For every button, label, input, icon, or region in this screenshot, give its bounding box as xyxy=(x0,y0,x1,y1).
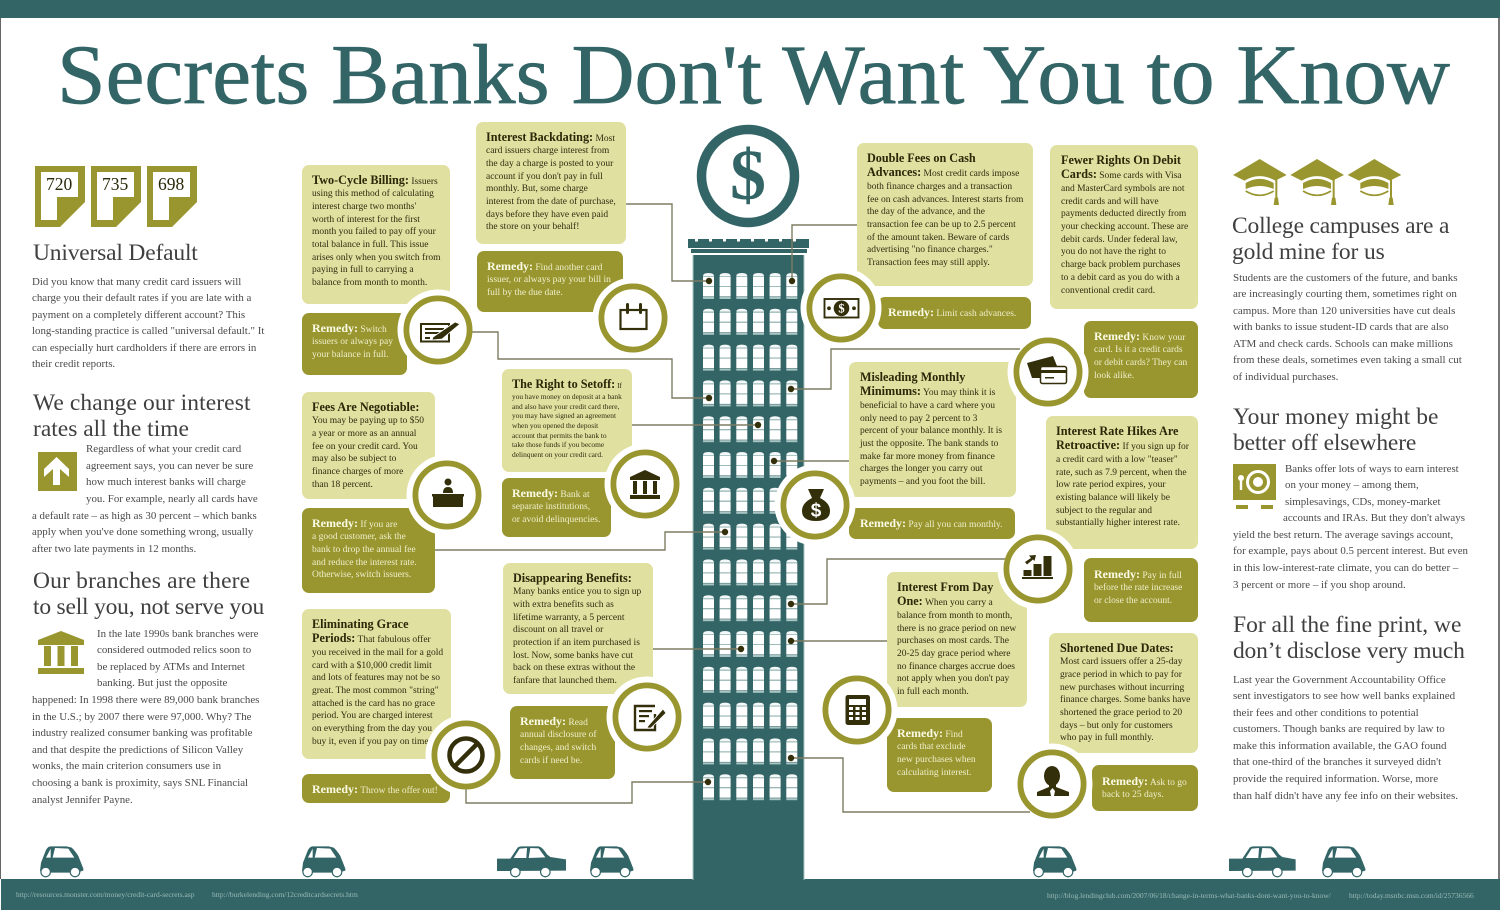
card: two-cycle billing: worth of interest for the first xyxy=(312,215,420,225)
card: the right to setoff: account that permits the bank to xyxy=(512,431,607,440)
text: interest rates lower xyxy=(32,510,257,555)
card: misleading monthly minimums: beneficial to have a card where you xyxy=(860,401,995,411)
card: eliminating grace periods: great. The most common "string" xyxy=(312,686,439,696)
top bar xyxy=(0,0,1500,18)
remedy: fees are negotiable xyxy=(302,508,435,593)
remedy: misleading minimums: Remedy: Pay all you can monthly. xyxy=(860,516,1002,530)
footer source link 3: http://blog.lendingclub.com/2007/06/18/change-in-terms-what-banks-dont-want-you-to-know/ xyxy=(1047,891,1331,900)
car 1 xyxy=(40,846,83,877)
card: interest from day one: 20-25 day grace period where xyxy=(897,649,1010,659)
card: shortened due dates: finance charges. Some banks have xyxy=(1060,695,1190,705)
card: fewer rights on debit cards: debit cards. Under federal law, xyxy=(1061,235,1178,245)
card: eliminating grace periods: and lots of features may not be so xyxy=(312,673,440,683)
card: two-cycle billing: interest charge two months' xyxy=(312,202,416,212)
car 5 xyxy=(1033,846,1076,877)
card: eliminating grace periods: period. You are charged interest xyxy=(312,711,433,721)
card: fees are negotiable: may also be subject to xyxy=(312,454,396,464)
remedy: eliminating grace periods xyxy=(302,774,450,803)
icon: bank building xyxy=(613,452,677,516)
remedy: misleading minimums xyxy=(849,508,1015,539)
card: two-cycle billing: month you failed to pay off your xyxy=(312,227,436,237)
icon: person xyxy=(1020,752,1084,816)
heading: our branches xyxy=(33,568,264,620)
right page edge xyxy=(1498,18,1500,879)
heading: our branches: Our branches are there xyxy=(33,568,250,594)
remedy: rate hikes: before the rate increase xyxy=(1094,583,1182,593)
text: your money wrapped xyxy=(1283,462,1465,524)
text: fine print: customers. Though banks are required by law to xyxy=(1233,723,1445,735)
card: interest backdating: account if you don't pay in full xyxy=(486,172,603,182)
card: shortened due dates: days – but only for customers xyxy=(1060,721,1173,731)
remedy: shortened due dates xyxy=(1092,765,1198,811)
heading: universal default: Universal Default xyxy=(33,240,198,266)
card: two-cycle billing: paying in full to carrying a xyxy=(312,265,414,275)
card: the right to setoff: delinquent on your credit card. xyxy=(512,450,603,459)
card: misleading monthly minimums: only need to pay 2 percent to 3 xyxy=(860,414,977,424)
heading: your money: Your money might be xyxy=(1233,404,1438,430)
heading: your money xyxy=(1233,404,1438,456)
car 6 sedan xyxy=(1229,846,1296,877)
card: double fees on cash advances: the day of the advance, and the xyxy=(867,207,985,217)
card: the right to setoff: take those funds if you become xyxy=(512,440,604,449)
card: fewer rights on debit cards: you do not have the right to xyxy=(1061,247,1166,257)
heading: your money: better off elsewhere xyxy=(1233,430,1416,456)
card: two-cycle billing: Two-Cycle Billing: Issuers xyxy=(312,172,438,186)
card: interest rate hikes are retroactive: low rate period expires, your xyxy=(1056,480,1165,490)
remedy: double fees xyxy=(878,297,1031,329)
panel: universal default icons xyxy=(35,166,197,227)
card: fewer rights on debit cards: credit cards and will have xyxy=(1061,197,1159,207)
card: disappearing benefits: with extra benefits such as xyxy=(513,600,614,610)
text: branches wrapped: be replaced by ATMs and Internet xyxy=(97,661,245,673)
footer source link 1: http://resources.monster.com/money/credit-card-secrets.asp xyxy=(16,890,194,899)
remedy: fees are negotiable: a good customer, ask the xyxy=(312,532,406,542)
building xyxy=(688,239,809,880)
heading: college campuses xyxy=(1232,213,1450,265)
card: shortened due dates: shortened the grace period to 20 xyxy=(1060,708,1182,718)
card: interest backdating: card issuers charge interest from xyxy=(486,146,609,156)
text: branches wrapped: banking. But just the opposite xyxy=(97,677,227,689)
card: interest rate hikes are retroactive: subject to the regular and xyxy=(1056,506,1152,516)
icon halos xyxy=(398,268,1092,824)
text: your money lower: yield the best return. The average savings account, xyxy=(1233,529,1453,541)
text: universal default: Did you know that many credit card issuers will xyxy=(32,276,241,288)
card: shortened due dates xyxy=(1049,633,1198,753)
remedy: fees are negotiable: and reduce the interest rate. xyxy=(312,558,417,568)
text: universal default: payment on a completely different account? This xyxy=(32,309,245,321)
card: interest from day one: not apply when you don't pay xyxy=(897,674,1009,684)
card: interest backdating: the day a charge is posted to your xyxy=(486,159,613,169)
text: fine print: Last year the Government Accountability Office xyxy=(1233,674,1446,686)
text: your money wrapped: simplesavings, CDs, money-market xyxy=(1285,496,1440,508)
text: interest rates wrapped: how much interest banks will charge xyxy=(86,476,246,488)
text: universal default: charge you their default rates if you are late with a xyxy=(32,292,251,304)
heading: we change our interest rates: rates all the time xyxy=(33,416,189,442)
card: eliminating grace periods: buy it, even if you pay on time. xyxy=(312,737,431,747)
card: the right to setoff: The Right to Setoff: If xyxy=(512,376,622,390)
card: the right to setoff: and also have your credit card there, xyxy=(512,402,619,411)
card: interest from day one: in full each month. xyxy=(897,687,969,697)
text: interest rates wrapped: agreement says, you can never be sure xyxy=(86,460,253,472)
card: fees are negotiable: fee on your credit card. You xyxy=(312,442,418,452)
icon: no symbol xyxy=(434,723,498,787)
card: misleading monthly minimums: charges the longer you carry out xyxy=(860,464,982,474)
card: eliminating grace periods: card with a $10,000 credit limit xyxy=(312,661,432,671)
remedy: disappearing benefits: annual disclosure of xyxy=(520,730,597,740)
card: misleading monthly minimums xyxy=(849,362,1016,497)
text: fine print: their fees and other conditions to potential xyxy=(1233,707,1419,719)
heading: our branches: to sell you, not serve you xyxy=(33,594,264,620)
card: fees are negotiable: Fees Are Negotiable: xyxy=(312,400,419,414)
remedy: rate hikes: or close the account. xyxy=(1094,596,1172,606)
card: two-cycle billing: arises only when you switch from xyxy=(312,253,440,263)
card: double fees on cash advances: Transaction fees may still apply. xyxy=(867,258,990,268)
remedy: two-cycle billing: your balance in full. xyxy=(312,350,389,360)
text: college campuses: ATM and check cards. Schools can make millions xyxy=(1233,338,1453,350)
heading: college campuses: gold mine for us xyxy=(1232,239,1385,265)
card: eliminating grace periods: Eliminating Grace xyxy=(312,616,408,630)
text: fine print: that one-third of the branches it surveyed didn't xyxy=(1233,756,1441,768)
remedy: shortened due dates: Remedy: Ask to go xyxy=(1102,774,1187,788)
card: shortened due dates: grace period in which to pay for xyxy=(1060,670,1182,680)
card: interest rate hikes are retroactive xyxy=(1046,416,1198,549)
card: fewer rights on debit cards: charge back problem purchases xyxy=(1061,260,1180,270)
text: branches lower: in the U.S.; by 2007 there were 97,000. Why? The xyxy=(32,711,251,723)
icon: banknote xyxy=(809,276,873,340)
text: universal default: long-standing practice is called "universal default." It xyxy=(32,325,264,337)
card: fewer rights on debit cards: Cards: Some cards with Visa xyxy=(1061,167,1182,181)
remedy: interest from day one: cards that exclude xyxy=(897,742,966,752)
remedy: two-cycle billing xyxy=(302,313,407,375)
icon: graduation caps xyxy=(1233,159,1401,205)
dollar coin xyxy=(702,130,794,222)
card: interest rate hikes are retroactive: substantially higher interest rate. xyxy=(1056,518,1180,528)
remedy: the right to setoff: Remedy: Bank at xyxy=(512,486,590,500)
card: interest rate hikes are retroactive: a credit card with a low "teaser" xyxy=(1056,455,1178,465)
card: disappearing benefits: Many banks entice you to sign up xyxy=(513,587,641,597)
footer source link 2: http://burkelending.com/12creditcardsecrets.htm xyxy=(212,890,358,899)
text: fine print: than half didn't have any fee info on their websites. xyxy=(1233,790,1458,802)
card: disappearing benefits xyxy=(503,563,653,694)
icon: up arrow xyxy=(38,452,77,491)
remedy: interest from day one: calculating interest. xyxy=(897,768,971,778)
panel: universal default icons: 698 xyxy=(158,174,184,194)
icon: bank olive xyxy=(38,631,84,674)
text: your money lower: for example, pays about 0.5 percent interest. But even xyxy=(1233,545,1468,557)
heading: we change our interest rates xyxy=(33,390,251,442)
car 3 sedan xyxy=(497,846,566,877)
card: disappearing benefits: fanfare that launched them. xyxy=(513,676,617,686)
card: double fees on cash advances xyxy=(857,143,1033,286)
remedy: interest from day one xyxy=(887,718,992,792)
text: universal default xyxy=(32,276,264,370)
card: interest from day one xyxy=(887,572,1027,707)
card: misleading monthly minimums: payments – and you foot the bill. xyxy=(860,477,985,487)
text: branches lower: analyst Jennifer Payne. xyxy=(32,794,133,806)
text: branches wrapped: In the late 1990s bank branches were xyxy=(97,628,258,640)
remedy: fees are negotiable: Otherwise, switch issuers. xyxy=(312,570,411,580)
card: interest backdating xyxy=(476,122,626,244)
card: interest from day one: purchases on most cards. The xyxy=(897,636,1009,646)
remedy: fewer rights xyxy=(1084,321,1198,398)
text: college campuses: with banks to issue student-ID cards that are also xyxy=(1233,321,1449,333)
remedy: rate hikes: Remedy: Pay in full xyxy=(1094,566,1182,580)
remedy: interest backdating: Remedy: Find another card xyxy=(487,258,602,272)
card: interest rate hikes are retroactive: Retroactive: If you sign up for xyxy=(1056,438,1189,452)
card: fewer rights on debit cards: payments deducted directly from xyxy=(1061,209,1186,219)
text: fine print: make this information available, the GAO found xyxy=(1233,740,1447,752)
text: your money wrapped: on your money – among them, xyxy=(1285,479,1419,491)
card: the right to setoff: when you opened the deposit xyxy=(512,421,598,430)
icon: calculator xyxy=(825,678,889,742)
text: your money wrapped: accounts and IRAs. But they don't always xyxy=(1283,512,1465,524)
text: branches lower xyxy=(32,694,259,806)
text: college campuses: are increasingly courting them, sometimes right on xyxy=(1233,288,1457,300)
card: shortened due dates: Shortened Due Dates: xyxy=(1060,640,1174,654)
card: double fees on cash advances: transaction fee can be up to 2.5 percent xyxy=(867,220,1016,230)
remedy: fewer rights: look alike. xyxy=(1094,371,1134,381)
text: branches lower: wonks, the main criterion consumers use in xyxy=(32,760,221,772)
card: shortened due dates: new purchases without incurring xyxy=(1060,683,1184,693)
card: misleading monthly minimums: Misleading Monthly xyxy=(860,370,965,384)
dollar coin: $ xyxy=(730,135,766,215)
card: eliminating grace periods: on everything from the day you xyxy=(312,724,432,734)
card: two-cycle billing: balance from month to month. xyxy=(312,278,427,288)
remedy: disappearing benefits: cards if need be. xyxy=(520,756,582,766)
card: interest from day one: there is no grace period on new xyxy=(897,624,1016,634)
card: double fees on cash advances: Double Fees on Cash xyxy=(867,150,976,164)
card: fees are negotiable xyxy=(302,392,435,499)
text: interest rates wrapped: Regardless of what your credit card xyxy=(86,443,241,455)
card: the right to setoff xyxy=(502,369,632,472)
car 2 xyxy=(302,846,345,877)
card: misleading monthly minimums: percent of your balance monthly. It is xyxy=(860,426,1002,436)
remedy: the right to setoff xyxy=(502,478,611,537)
remedy: the right to setoff: separate institutions, xyxy=(512,502,590,512)
text: college campuses: from these deals, sometimes even taking a small cut xyxy=(1233,354,1462,366)
remedy: interest from day one: new purchases when xyxy=(897,755,976,765)
car 4 xyxy=(590,846,633,877)
remedy: interest backdating: full by the due date. xyxy=(487,288,563,298)
remedy: interest backdating: issuer, or always pay your bill in xyxy=(487,275,611,285)
card: fees are negotiable: a year or more as an annual xyxy=(312,429,416,439)
card: fewer rights on debit cards: Fewer Rights On Debit xyxy=(1061,152,1181,166)
text: your money lower: 3 percent or more – if you shop around. xyxy=(1233,579,1406,591)
card: fees are negotiable: than 18 percent. xyxy=(312,480,373,490)
card: interest from day one: no finance charges accrue does xyxy=(897,662,1015,672)
card: interest rate hikes are retroactive: rate, such as 7.9 percent, when the xyxy=(1056,468,1187,478)
remedy: disappearing benefits: Remedy: Read xyxy=(520,714,588,728)
card: double fees on cash advances: Advances: Most credit cards impose xyxy=(867,165,1019,179)
remedy: two-cycle billing: Remedy: Switch xyxy=(312,320,387,334)
heading: college campuses: College campuses are a xyxy=(1232,213,1449,239)
text: interest rates wrapped: you. For example, nearly all cards have xyxy=(86,493,258,505)
card: the right to setoff: you may have signed an agreement xyxy=(512,411,616,420)
card: disappearing benefits: Disappearing Benefits: xyxy=(513,570,632,584)
text: your money lower: in this low-interest-rate climate, you can do better – xyxy=(1233,562,1458,574)
text: interest rates lower: after two late payments in 12 months. xyxy=(32,543,196,555)
card: double fees on cash advances: of the amount taken. Beware of cards xyxy=(867,233,1009,243)
icon: money bag xyxy=(783,473,847,537)
remedy: fewer rights: or debit cards? They can xyxy=(1094,358,1187,368)
card: interest backdating: monthly. But, some charge xyxy=(486,184,588,194)
card: disappearing benefits: discount on all travel or xyxy=(513,625,603,635)
icon: document and pen xyxy=(615,685,679,749)
text: your money lower xyxy=(1233,529,1468,591)
icon: money bag: $ xyxy=(811,500,822,522)
text: college campuses: of individual purchases. xyxy=(1233,371,1338,383)
remedy: rate hikes xyxy=(1084,558,1198,622)
card: interest backdating: the store on your behalf! xyxy=(486,222,579,232)
card: misleading monthly minimums: make far more money from finance xyxy=(860,452,995,462)
remedy: disappearing benefits: changes, and switch xyxy=(520,743,596,753)
remedy: two-cycle billing: issuers or always pay xyxy=(312,337,393,347)
text: your money wrapped: Banks offer lots of ways to earn interest xyxy=(1285,462,1459,474)
icon: bank desk xyxy=(415,463,479,527)
text: branches lower: choosing a bank is proximity, says SNL Financial xyxy=(32,777,248,789)
card: disappearing benefits: lost. Now, some banks have cut xyxy=(513,651,633,661)
text: branches wrapped xyxy=(97,628,258,689)
card: interest backdating: interest from the date of purchase, xyxy=(486,197,616,207)
remedy: eliminating grace periods: Remedy: Throw the offer out! xyxy=(312,782,438,796)
panel: universal default icons: 735 xyxy=(102,174,128,194)
text: branches lower: industry realized consumer banking was profitable xyxy=(32,727,252,739)
card: disappearing benefits: lifetime warranty, a 5 percent xyxy=(513,613,624,623)
text: branches lower: happened: In 1998 there were 89,000 bank branches xyxy=(32,694,259,706)
heading: fine print: For all the fine print, we xyxy=(1233,612,1461,638)
card: disappearing benefits: protection if an item purchased is xyxy=(513,638,640,648)
text: interest rates lower: apply when you've done something wrong, usually xyxy=(32,526,253,538)
heading: fine print: don’t disclose very much xyxy=(1233,638,1465,664)
card: fees are negotiable: finance charges of more xyxy=(312,467,403,477)
left page edge xyxy=(0,18,1,879)
car 7 xyxy=(1322,846,1365,877)
remedy: interest backdating xyxy=(477,251,623,312)
card: eliminating grace periods: attached is the card has no grace xyxy=(312,699,435,709)
text: interest rates wrapped xyxy=(86,443,258,505)
card: two-cycle billing: total balance in full. This issue xyxy=(312,240,428,250)
card: eliminating grace periods xyxy=(302,609,451,759)
card: interest backdating: days before they have even paid xyxy=(486,210,608,220)
remedy: fees are negotiable: Remedy: If you are xyxy=(312,516,397,530)
card: two-cycle billing: using this method of calculating xyxy=(312,189,434,199)
heading: fine print xyxy=(1233,612,1465,664)
text: universal default: can especially hurt cardholders if there are errors in xyxy=(32,342,256,354)
text: fine print: sent investigators to see how well banks explained xyxy=(1233,690,1455,702)
text: branches lower: and that despite the predictions of Silicon Valley xyxy=(32,744,243,756)
remedy: fewer rights: Remedy: Know your xyxy=(1094,328,1185,342)
card: double fees on cash advances: both finance charges and a transaction xyxy=(867,182,1012,192)
card: interest from day one: One: When you carry a xyxy=(897,594,993,608)
text: branches wrapped: considered outmoded relics soon to xyxy=(97,644,251,656)
text: college campuses xyxy=(1233,272,1462,383)
remedy: double fees: Remedy: Limit cash advances. xyxy=(888,304,1016,318)
card: double fees on cash advances: advertising "no finance charges." xyxy=(867,245,993,255)
card: shortened due dates: who pay in full monthly. xyxy=(1060,733,1154,743)
card: fewer rights on debit cards: conventional credit card. xyxy=(1061,286,1155,296)
card: interest from day one: Interest From Day xyxy=(897,580,993,594)
icon: check and pen xyxy=(406,298,470,362)
icon: banknote: $ xyxy=(838,302,845,316)
text: universal default: their credit reports. xyxy=(32,358,115,370)
card: disappearing benefits: back on these extras without the xyxy=(513,663,635,673)
remedy: the right to setoff: or avoid delinquencies. xyxy=(512,515,600,525)
card: fewer rights on debit cards: your checking account. These are xyxy=(1061,222,1188,232)
icon: credit cards xyxy=(1016,340,1080,404)
card: fees are negotiable: You may be paying up to $50 xyxy=(312,416,424,426)
text: fine print xyxy=(1233,674,1458,802)
remedy: interest from day one: Remedy: Find xyxy=(897,726,963,740)
card: eliminating grace periods: you received in the mail for a gold xyxy=(312,648,443,658)
icon: safe xyxy=(1233,464,1276,509)
card: the right to setoff: you have money on deposit at a bank xyxy=(512,392,622,401)
text: fine print: provide the required information. Worse, more xyxy=(1233,773,1438,785)
card: eliminating grace periods: Periods: That fabulous offer xyxy=(312,631,431,645)
text: college campuses: Students are the customers of the future, and banks xyxy=(1233,272,1458,284)
remedy: shortened due dates: back to 25 days. xyxy=(1102,790,1164,800)
title: Secrets Banks Don't Want You to Know xyxy=(57,28,1451,122)
panel: universal default icons: 720 xyxy=(46,174,72,194)
icon: rising chart xyxy=(1006,537,1070,601)
heading: we change our interest rates: We change our interest xyxy=(33,390,251,416)
connectors and window dots xyxy=(435,204,1030,812)
card: interest backdating: Interest Backdating: Most xyxy=(486,130,615,144)
card: fewer rights on debit cards: and MasterCard symbols are not xyxy=(1061,184,1184,194)
remedy: fewer rights: card. Is it a credit cards xyxy=(1094,345,1183,355)
card: interest rate hikes are retroactive: Interest Rate Hikes Are xyxy=(1056,424,1178,438)
remedy: disappearing benefits xyxy=(510,706,615,779)
card: double fees on cash advances: fee on cash advances. Interest starts from xyxy=(867,195,1023,205)
card: interest from day one: balance from month to month, xyxy=(897,611,1012,621)
card: misleading monthly minimums: just the opposite. The bank stands to xyxy=(860,439,998,449)
icon: calendar xyxy=(601,286,665,350)
card: misleading monthly minimums: Minimums: You may think it is xyxy=(860,384,995,398)
footer bar xyxy=(1,879,1500,910)
footer source link 4: http://today.msnbc.msn.com/id/25736566 xyxy=(1349,891,1474,900)
text: interest rates lower: a default rate – as high as 30 percent – which banks xyxy=(32,510,257,522)
card: two-cycle billing xyxy=(302,165,450,304)
card: interest rate hikes are retroactive: existing balance will likely be xyxy=(1056,493,1170,503)
card: fewer rights on debit cards: to a debit card as you do with a xyxy=(1061,273,1180,283)
card: shortened due dates: Most card issuers offer a 25-day xyxy=(1060,657,1182,667)
text: college campuses: campus. More than 120 universities have cut deals xyxy=(1233,305,1455,317)
remedy: fees are negotiable: bank to drop the annual fee xyxy=(312,545,416,555)
card: fewer rights on debit cards xyxy=(1050,145,1198,309)
